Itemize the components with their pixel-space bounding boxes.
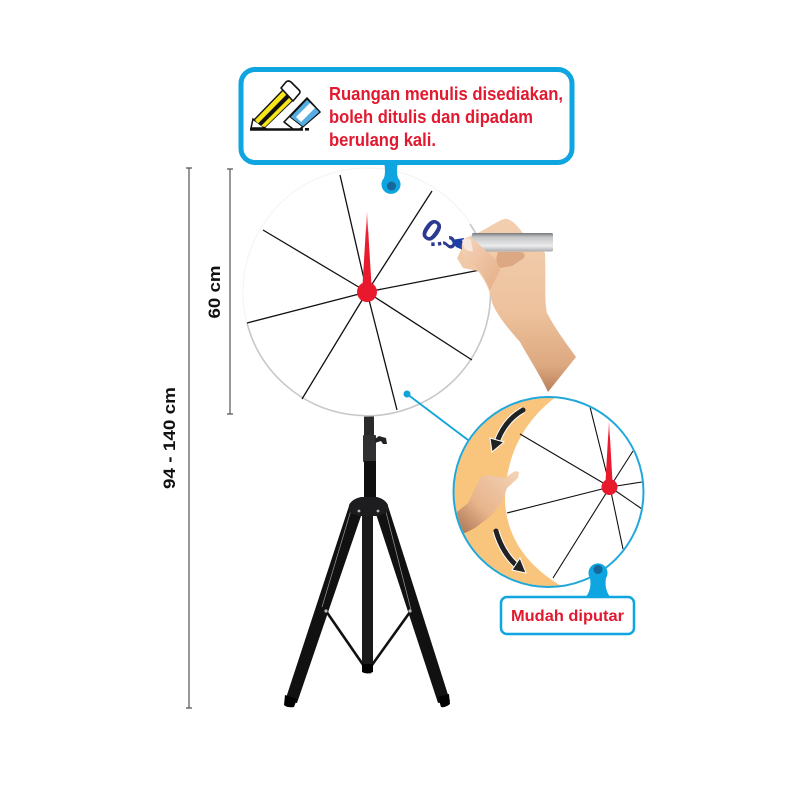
inset ring [454, 397, 644, 587]
index finger [462, 237, 500, 290]
tripod stand [284, 416, 450, 707]
callout pin [382, 162, 400, 194]
wheel needle [362, 211, 372, 285]
fingernail [462, 238, 473, 251]
tripod braces [326, 611, 410, 669]
label: easy to spin [501, 563, 634, 634]
handwriting on wheel: 0 [415, 211, 449, 250]
handwriting on wheel: ? [431, 233, 461, 253]
label pin [585, 563, 611, 598]
tripod left leg [285, 506, 361, 703]
inset spokes [507, 407, 642, 578]
knuckle shadow [496, 252, 524, 268]
handwriting on wheel: . [430, 225, 436, 252]
tripod lock knob [375, 436, 387, 444]
label box [501, 597, 634, 634]
small hand [457, 471, 519, 533]
callout text: berulang kali. [329, 130, 436, 150]
inset: easy to spin [450, 390, 644, 600]
callout: writing space [241, 70, 572, 194]
tripod leg highlights [322, 508, 411, 610]
arrow up [490, 410, 523, 452]
tripod collar [363, 435, 376, 462]
callout text [329, 84, 563, 150]
dimension: total height 94 - 140 cm [160, 168, 192, 708]
dimension: total height 94 - 140 cm: 94 - 140 cm [160, 387, 179, 489]
wheel face [243, 168, 491, 416]
callout text: Ruangan menulis disediakan, [329, 84, 563, 104]
inset hub [602, 479, 618, 495]
wheel [243, 168, 491, 416]
orange crescent [454, 398, 560, 586]
marker pen [472, 233, 553, 252]
handwriting on wheel [415, 211, 461, 253]
hand holding marker [451, 219, 576, 392]
label text: Mudah diputar [511, 608, 624, 625]
hand [457, 219, 576, 392]
inset content [454, 398, 642, 586]
arrow down [496, 531, 526, 573]
tripod centre leg [362, 512, 373, 672]
dimension: wheel diameter 60 cm: 60 cm [205, 266, 224, 318]
tripod right leg [376, 506, 450, 703]
tripod hub [349, 497, 388, 516]
marker tip [451, 238, 464, 250]
dimension: wheel diameter 60 cm [205, 169, 233, 414]
infographic canvas [164, 67, 644, 709]
wheel spokes [247, 175, 480, 410]
callout box [241, 70, 572, 162]
wheel rim shaded edge [247, 224, 491, 416]
tripod upper pole [364, 416, 374, 438]
wheel hub [357, 282, 377, 302]
inset needle [606, 420, 612, 482]
tripod feet [284, 664, 450, 707]
inset face [454, 397, 644, 587]
tripod hub screws [324, 510, 412, 674]
leader line from wheel to inset [404, 390, 468, 440]
callout text: boleh ditulis dan dipadam [329, 107, 533, 127]
tripod lower pole [364, 461, 376, 499]
icon: pencil and eraser [250, 81, 320, 131]
